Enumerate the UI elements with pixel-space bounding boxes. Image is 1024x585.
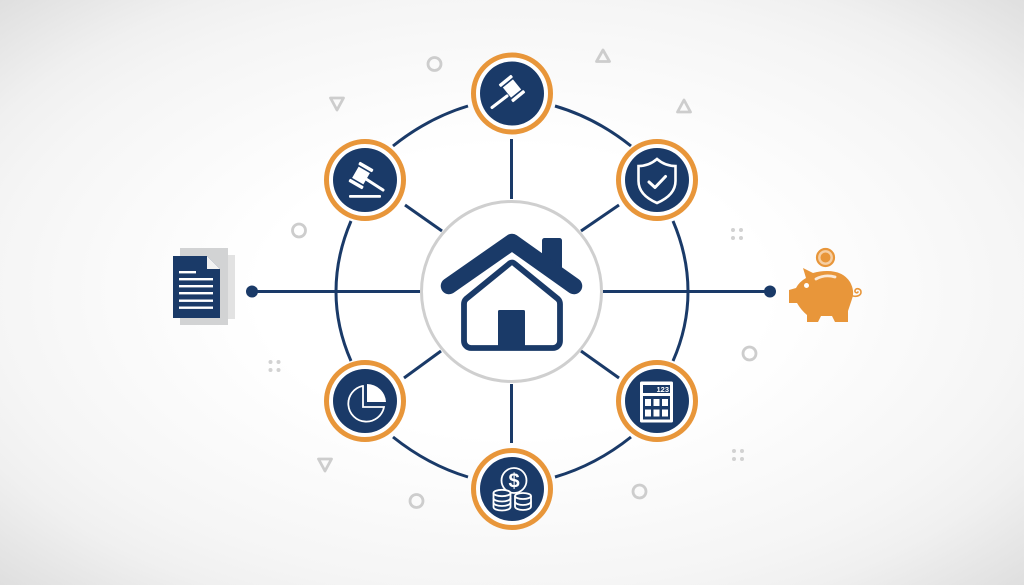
icon: house body bbox=[464, 262, 560, 348]
label: dollar sign: $ bbox=[508, 470, 520, 492]
node: pie chart lower left bbox=[326, 362, 404, 440]
decorative background shapes bbox=[268, 50, 756, 508]
icon: piggy bank with coin bbox=[789, 249, 861, 322]
icon: coin stacks bbox=[494, 490, 531, 510]
icon: check mark bbox=[649, 176, 666, 188]
node: gavel top bbox=[474, 55, 550, 132]
icon: dollar coin bbox=[502, 468, 526, 493]
front document page bbox=[173, 256, 220, 318]
icon: coin bbox=[817, 249, 834, 266]
icon: chimney bbox=[542, 238, 562, 280]
node: calculator lower right bbox=[618, 362, 696, 440]
icon: shield bbox=[638, 159, 676, 203]
label: calculator display: 123 bbox=[656, 385, 669, 394]
connector end dots bbox=[246, 286, 776, 298]
icon: roof bbox=[449, 242, 574, 286]
node: shield upper right bbox=[618, 142, 696, 218]
pig body bbox=[789, 268, 853, 322]
icon: pie outline bbox=[348, 386, 384, 422]
node: gavel upper left bbox=[326, 142, 404, 218]
icon: document stack bbox=[173, 248, 235, 325]
icon: pie slice bbox=[367, 384, 386, 402]
icon: door bbox=[498, 310, 525, 349]
node: coins bottom bbox=[474, 450, 550, 528]
connector lines and outer ring bbox=[252, 106, 770, 477]
center hub: house bbox=[422, 202, 602, 382]
